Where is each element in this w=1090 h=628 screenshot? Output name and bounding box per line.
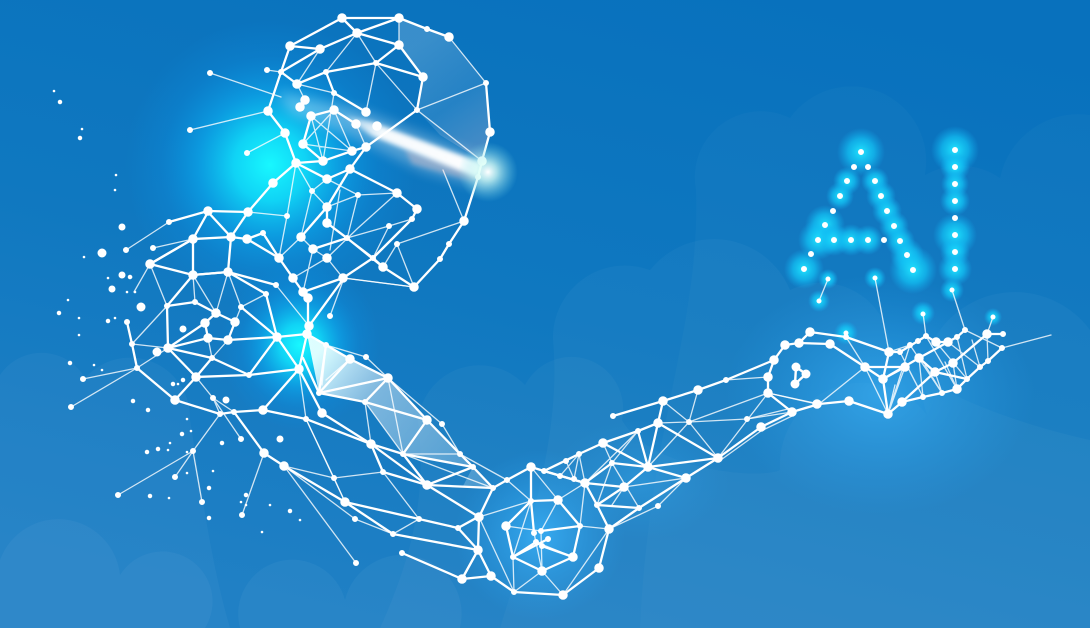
left shoulder mesh [71, 212, 414, 563]
letter dots [804, 150, 955, 270]
glow: behind head [125, 20, 415, 310]
glow: under hand [725, 275, 1035, 515]
glow: forearm [550, 420, 730, 540]
light beam across the face [278, 92, 518, 202]
wrist joint triangle icon [795, 367, 806, 384]
letter A glow [784, 126, 1002, 345]
head and torso mesh [150, 18, 490, 292]
network nodes: medium [71, 29, 1003, 592]
elbow mesh [402, 467, 609, 595]
translucent panel: head side [399, 18, 490, 161]
upper arm mesh [299, 334, 507, 579]
network nodes: large [150, 18, 987, 595]
wrist and hand mesh [747, 278, 1051, 419]
lens flare [458, 142, 518, 202]
forearm mesh [544, 360, 817, 529]
AI letters made of glowing dots [784, 126, 1002, 345]
floating particles [54, 91, 300, 532]
glow: shoulder [220, 260, 380, 430]
translucent panel: upper arm [307, 334, 493, 488]
glow: elbow [455, 450, 625, 620]
